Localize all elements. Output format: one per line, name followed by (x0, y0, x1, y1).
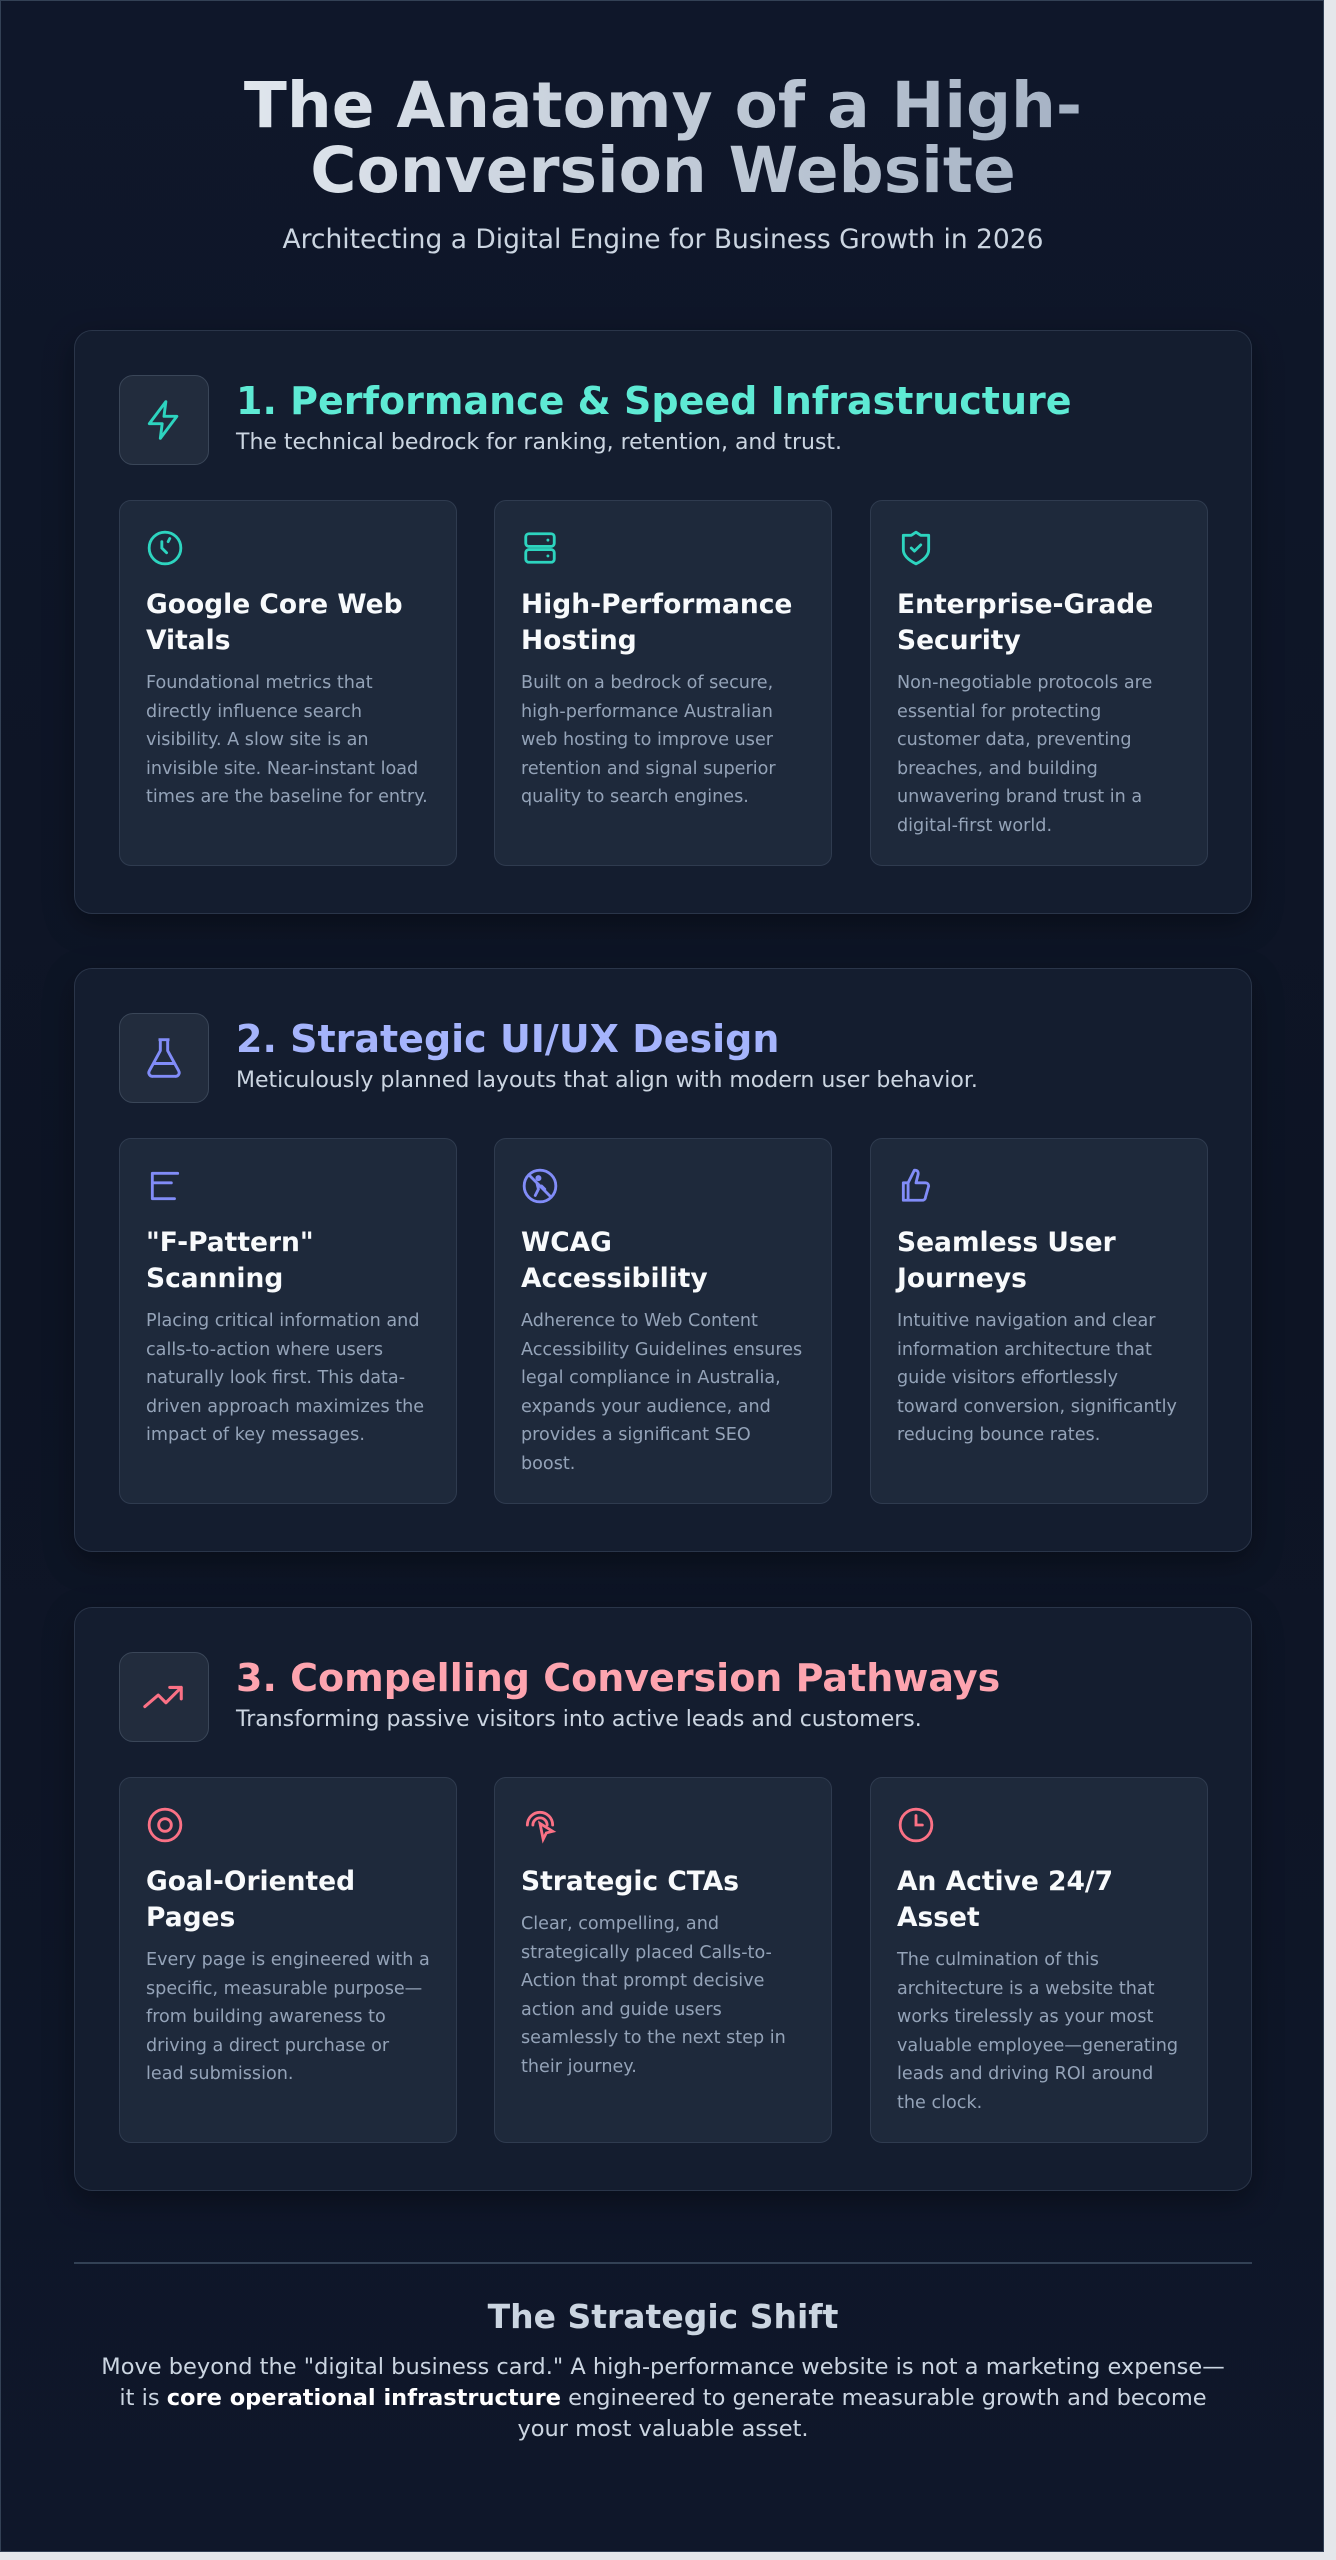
heading: 2. Strategic UI/UX Design (236, 1017, 779, 1061)
section subtitle: The technical bedrock for ranking, retention, and trust. (236, 430, 842, 455)
card: f-pattern: Placing critical information and calls-to-action where users naturally look first. This data-driven approach maximizes the impact of key messages. (146, 1311, 424, 1445)
card: f-pattern: "F-Pattern" Scanning (146, 1227, 314, 1294)
card: goal pages (119, 1777, 457, 2143)
heading: 3. Compelling Conversion Pathways (236, 1656, 1000, 1700)
section subtitle: Meticulously planned layouts that align with modern user behavior. (236, 1068, 978, 1093)
card: 24/7 asset: The culmination of this architecture is a website that works tirelessly as your most valuable employee—generating leads and driving ROI around the clock. (897, 1950, 1178, 2113)
card: ctas: Strategic CTAs (521, 1866, 739, 1897)
card: security (870, 500, 1208, 866)
card: hosting: Built on a bedrock of secure, high-performance Australian web hosting to improve user retention and signal superior quality to search engines. (521, 673, 776, 807)
card: ctas (494, 1777, 832, 2143)
card: core web vitals (119, 500, 457, 866)
card: hosting (494, 500, 832, 866)
title: The Anatomy of a High- (244, 69, 1082, 142)
card: journeys: Intuitive navigation and clear information architecture that guide visitors effortlessly toward conversion, significantly reducing bounce rates. (897, 1311, 1177, 1445)
card: ctas: Clear, compelling, and strategically placed Calls-to-Action that prompt decisive action and guide users seamlessly to the next step in their journey. (521, 1914, 786, 2077)
icon: trending up (119, 1652, 209, 1742)
card: wcag: Adherence to Web Content Accessibility Guidelines ensures legal compliance in Australia, expands your audience, and provides a significant SEO boost. (521, 1311, 802, 1474)
card: security: Enterprise-Grade Security (897, 589, 1153, 656)
section subtitle: Transforming passive visitors into active leads and customers. (236, 1707, 922, 1732)
panel: performance (74, 330, 1252, 914)
card: journeys (870, 1138, 1208, 1504)
card: journeys: Seamless User Journeys (897, 1227, 1116, 1294)
subtitle: Architecting a Digital Engine for Business Growth in 2026 (282, 224, 1044, 255)
card: hosting: High-Performance Hosting (521, 589, 792, 656)
card: wcag: WCAG Accessibility (521, 1227, 708, 1294)
panel: conversion (74, 1607, 1252, 2191)
heading: 1. Performance & Speed Infrastructure (236, 379, 1072, 423)
title: Conversion Website (310, 134, 1016, 207)
card: wcag (494, 1138, 832, 1504)
footer heading: The Strategic Shift (488, 2297, 838, 2336)
card: goal pages: Goal-Oriented Pages (146, 1866, 355, 1933)
card: goal pages: Every page is engineered with a specific, measurable purpose—from building awareness to driving a direct purchase or lead submission. (146, 1950, 430, 2084)
card: 24/7 asset: An Active 24/7 Asset (897, 1866, 1113, 1933)
card: security: Non-negotiable protocols are essential for protecting customer data, preventing breaches, and building unwavering brand trust in a digital-first world. (897, 673, 1152, 836)
card: core web vitals: Foundational metrics that directly influence search visibility. A slow site is an invisible site. Near-instant load times are the baseline for entry. (146, 673, 428, 807)
card: core web vitals: Google Core Web Vitals (146, 589, 403, 656)
icon: lightning (119, 375, 209, 465)
card: 24/7 asset (870, 1777, 1208, 2143)
panel: ui/ux (74, 968, 1252, 1552)
card: f-pattern (119, 1138, 457, 1504)
icon: flask (119, 1013, 209, 1103)
title (1, 73, 1325, 203)
footer text: Move beyond the "digital business card." A high-performance website is not a marketing expense—it is core operational infrastructure engineered to generate measurable growth and become your most valuable asset. (101, 2354, 1225, 2442)
